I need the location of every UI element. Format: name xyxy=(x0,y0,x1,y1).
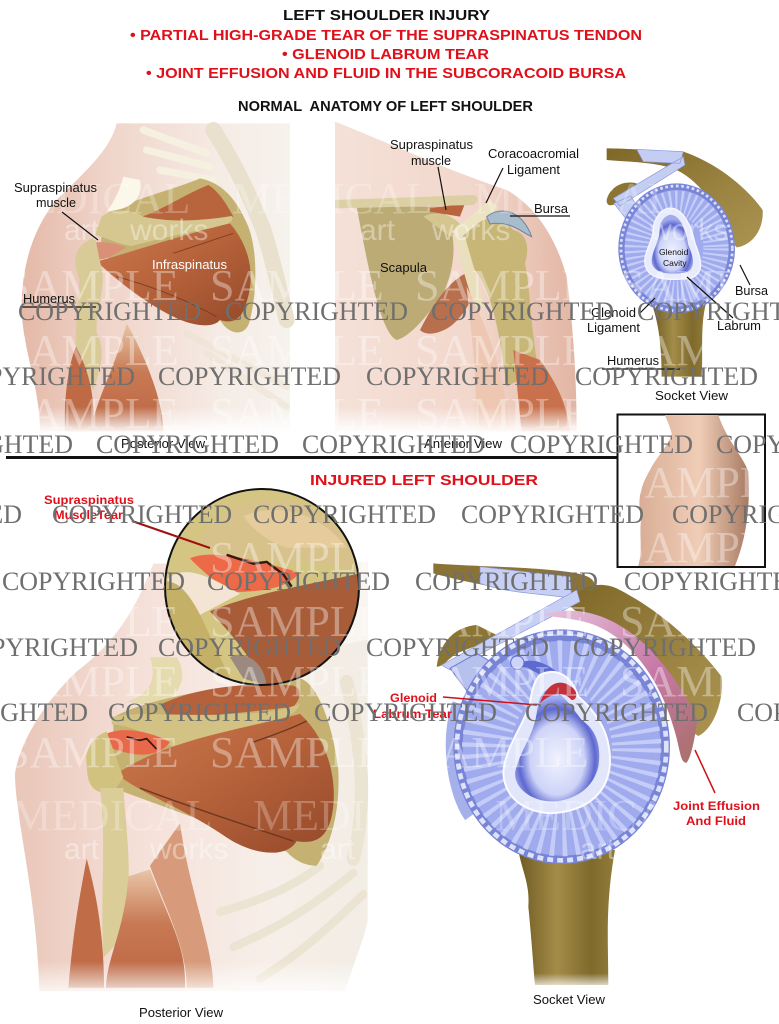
fibres xyxy=(637,203,716,293)
upper bone xyxy=(200,500,363,569)
watermark: art works: works xyxy=(149,833,228,866)
watermark: MEDICAL rows: MEDICAL xyxy=(232,174,432,223)
humerus xyxy=(75,237,103,390)
watermark: SAMPLE rows: SAMPLE xyxy=(5,389,179,438)
capsule stripes xyxy=(621,186,732,311)
watermark: SAMPLE rows: SAMPLE xyxy=(5,261,179,310)
supraspinatus peek xyxy=(430,203,465,217)
callout: supraspinatus muscle tear xyxy=(44,495,210,548)
callout: joint effusion and fluid: Joint Effusion xyxy=(673,801,760,813)
watermark: COPYRIGHTED rows: COPYRIGHTED xyxy=(2,567,185,596)
circle contents xyxy=(163,488,363,689)
normal posterior labels: muscle xyxy=(36,196,76,210)
coracoacromial ligament xyxy=(452,200,498,239)
callout: supraspinatus muscle tear: MuscleTear xyxy=(54,510,124,522)
watermark: COPYRIGHTED rows: COPYRIGHTED xyxy=(302,430,485,459)
labrum xyxy=(503,672,610,813)
arm muscle long head xyxy=(106,869,185,988)
clavicle xyxy=(335,195,478,208)
coracohumeral ligament xyxy=(450,653,493,695)
humeral head xyxy=(86,732,123,793)
watermark: COPYRIGHTED rows: COPYRIGHTED xyxy=(158,633,341,662)
watermark: COPYRIGHTED rows: COPYRIGHTED xyxy=(415,567,598,596)
watermark: SAMPLE rows: SAMPLE xyxy=(415,597,589,646)
watermark: art works: art xyxy=(580,833,616,866)
normal socket labels: Cavity xyxy=(663,258,687,268)
watermark: SAMPLE rows: SAMPLE xyxy=(210,326,384,375)
normal socket labels: Ligament xyxy=(587,321,641,335)
coracoacromial ligament xyxy=(442,590,580,670)
skin silhouette xyxy=(15,562,368,991)
humerus xyxy=(462,219,538,387)
normal posterior labels xyxy=(14,181,227,451)
watermark: COPYRIGHTED rows: COPYRIGHTED xyxy=(461,500,644,529)
supraspinatus xyxy=(137,185,233,240)
watermark: COPYRIGHTED rows: COPYRIGHTED xyxy=(431,297,614,326)
glenoid cavity xyxy=(515,690,599,802)
callout: joint effusion and fluid: And Fluid xyxy=(686,816,746,828)
watermark: MEDICAL rows: MEDICAL xyxy=(253,791,453,840)
callout: joint effusion and fluid xyxy=(673,750,760,828)
capsule xyxy=(618,183,735,313)
clavicle xyxy=(433,563,595,598)
arm muscles xyxy=(65,347,94,432)
lower bone xyxy=(163,582,230,679)
watermark: COPYRIGHTED rows: COPYRIGHTED xyxy=(573,633,756,662)
watermark: art works: works xyxy=(649,214,728,247)
watermark: art works xyxy=(64,214,728,866)
normal socket labels: Humerus xyxy=(607,354,659,368)
bursa xyxy=(487,211,532,237)
tear crack xyxy=(227,555,292,587)
supraspinatus insertion xyxy=(80,242,126,260)
normal anterior labels: Supraspinatus xyxy=(390,138,473,152)
watermark: SAMPLE rows: SAMPLE xyxy=(5,728,179,777)
bottom fade xyxy=(13,961,370,1000)
panel: normal posterior view xyxy=(20,123,292,433)
watermark: SAMPLE rows: SAMPLE xyxy=(5,597,179,646)
spine of scapula xyxy=(95,211,232,246)
glenoid cavity xyxy=(652,215,693,274)
watermark: COPYRIGHTED rows: COPYRIGHTED xyxy=(314,698,497,727)
neck highlight xyxy=(107,177,141,212)
radial fibres xyxy=(487,665,637,832)
watermark: COPYRIGHTED rows: COPYRIGHTED xyxy=(52,500,232,529)
normal anterior labels: Scapula xyxy=(380,261,427,275)
watermark: COPYRIGHTED rows: COPYRIGHTED xyxy=(575,362,758,391)
inset: body location xyxy=(618,414,765,567)
injured view captions xyxy=(139,993,606,1020)
joint lining xyxy=(463,641,661,856)
capsule left band xyxy=(452,703,470,817)
tear cracks xyxy=(127,737,157,749)
clavicle ligament xyxy=(480,567,572,598)
normal anterior labels: Coracoacromial xyxy=(488,147,579,161)
normal socket labels xyxy=(587,247,768,403)
watermark: art works: works xyxy=(431,214,510,247)
watermark: COPYRIGHTED rows: COPYRIGHTED xyxy=(96,430,279,459)
torn supraspinatus xyxy=(95,730,170,755)
tendon cross-section xyxy=(511,656,524,669)
infraspinatus muscle xyxy=(117,714,334,853)
scapula xyxy=(357,207,454,340)
watermark: SAMPLE rows: SAMPLE xyxy=(5,657,179,706)
watermark: COPYRIGHTED rows: COPYRIGHTED xyxy=(366,362,549,391)
callout: glenoid labrum tear: Labrum Tear xyxy=(373,709,453,721)
torso xyxy=(638,415,749,566)
watermark: SAMPLE rows: SAMPLE xyxy=(210,533,384,582)
inset frame xyxy=(618,414,765,567)
callout: glenoid labrum tear xyxy=(373,693,537,721)
circle base xyxy=(163,488,363,689)
bottom fade xyxy=(20,407,292,433)
skin silhouette xyxy=(22,123,290,432)
muscle xyxy=(210,572,363,689)
ligaments xyxy=(613,149,685,221)
watermark: SAMPLE rows: SAMPLE xyxy=(210,389,384,438)
normal socket labels: Bursa xyxy=(735,284,768,298)
watermark: SAMPLE rows: SAMPLE xyxy=(210,261,384,310)
watermark: COPYRIGHTED rows: COPYRIGHTED xyxy=(253,500,436,529)
circle outline xyxy=(165,489,359,685)
normal anterior labels: Bursa xyxy=(534,202,568,216)
lower arm soft tissue xyxy=(467,287,510,432)
watermark: SAMPLE rows: SAMPLE xyxy=(415,389,589,438)
scapula xyxy=(100,178,255,332)
normal posterior labels: Supraspinatus xyxy=(14,181,97,195)
normal anterior labels: Ligament xyxy=(507,163,561,177)
muscle fibres xyxy=(117,233,233,317)
injured view captions: Socket View xyxy=(533,993,606,1007)
panel: normal socket view xyxy=(607,148,763,377)
normal posterior labels: Posterior View xyxy=(121,437,206,451)
capsule pattern xyxy=(457,633,666,860)
watermark: SAMPLE rows: SAMPLE xyxy=(415,728,589,777)
callout: glenoid labrum tear: Glenoid xyxy=(390,693,437,705)
watermark: art works: works xyxy=(129,214,208,247)
arm tendon medial xyxy=(150,823,213,988)
torso white upper area xyxy=(200,562,368,653)
watermark: art works: art xyxy=(320,833,356,866)
labrum tear xyxy=(540,683,576,703)
arm muscle lateral xyxy=(68,859,104,988)
watermark: COPYRIGHTED rows: COPYRIGHTED xyxy=(18,297,201,326)
watermark: SAMPLE rows: SAMPLE xyxy=(210,597,384,646)
muscle division lines xyxy=(140,721,307,841)
watermark: SAMPLE rows: SAMPLE xyxy=(210,728,384,777)
watermark: MEDICAL rows: MEDICAL xyxy=(12,791,212,840)
watermark: art works: art xyxy=(360,214,396,247)
acromion neck xyxy=(126,657,182,707)
watermark: art works: art xyxy=(64,214,100,247)
title: LEFT SHOULDER INJURY xyxy=(283,7,490,24)
watermark: COPYRIGHTED rows: COPYRIGHTED xyxy=(108,698,291,727)
supraspinatus xyxy=(163,684,300,717)
section divider xyxy=(6,456,617,459)
watermark: COPYRIGHTED rows: COPYRIGHTED xyxy=(225,297,408,326)
deltoid muscle xyxy=(513,350,570,432)
scapula xyxy=(113,679,339,866)
rotator interval xyxy=(625,190,729,307)
panel: injured socket view xyxy=(433,563,722,990)
distended bursa xyxy=(540,611,697,763)
coracoid xyxy=(607,182,637,205)
pale tissue xyxy=(167,572,240,615)
panel: injured posterior view xyxy=(13,562,370,1000)
normal socket labels: Labrum xyxy=(717,319,761,333)
gray tissue xyxy=(230,655,267,686)
acromion xyxy=(570,585,722,736)
watermark: SAMPLE rows: SAMPLE xyxy=(415,326,589,375)
bottom fade xyxy=(333,407,580,433)
watermark: SAMPLE rows: SAMPLE xyxy=(5,326,179,375)
upper bone highlight xyxy=(243,510,347,548)
normal posterior labels: Infraspinatus xyxy=(152,258,227,272)
normal socket labels: Socket View xyxy=(655,389,729,403)
labrum xyxy=(645,208,701,279)
injured view captions: Posterior View xyxy=(139,1006,224,1020)
heading: injured left shoulder: INJURED LEFT SHOULDER xyxy=(310,472,538,489)
normal anterior labels: muscle xyxy=(411,154,451,168)
watermark: COPYRIGHTED rows xyxy=(0,297,779,727)
coracoid xyxy=(437,625,500,667)
watermark: COPYRIGHTED rows: COPYRIGHTED xyxy=(366,633,549,662)
finding: joint effusion: • JOINT EFFUSION AND FLUID IN THE SUBCORACOID BURSA xyxy=(146,65,626,82)
watermark: COPYRIGHTED rows: COPYRIGHTED xyxy=(525,698,708,727)
watermark: COPYRIGHTED rows: COPYRIGHTED xyxy=(207,567,390,596)
humerus shaft xyxy=(518,850,615,985)
watermark: MEDICAL rows: MEDICAL xyxy=(495,791,695,840)
skin silhouette xyxy=(335,122,577,432)
normal socket labels: Glenoid xyxy=(591,306,636,320)
spine of scapula xyxy=(112,703,300,749)
capsule xyxy=(453,629,670,864)
heading: normal anatomy: NORMAL ANATOMY OF LEFT SHOULDER xyxy=(238,98,533,115)
biceps tendon xyxy=(453,237,485,310)
callout: supraspinatus muscle tear: Supraspinatus xyxy=(44,495,134,507)
watermark: MEDICAL rows: MEDICAL xyxy=(474,174,674,223)
coracoid xyxy=(423,213,463,237)
zoomed detail: supraspinatus tear xyxy=(163,488,363,689)
watermark: SAMPLE rows: SAMPLE xyxy=(415,261,589,310)
torn tendon xyxy=(190,555,300,592)
triceps xyxy=(91,323,163,432)
watermark: MEDICAL rows xyxy=(0,174,695,840)
biceps tendon xyxy=(522,661,557,680)
normal posterior labels: Humerus xyxy=(23,292,75,306)
humerus shaft xyxy=(652,303,706,377)
watermark: SAMPLE rows xyxy=(5,261,779,777)
finding: supraspinatus tear: • PARTIAL HIGH-GRADE TEAR OF THE SUPRASPINATUS TENDON xyxy=(130,27,642,44)
normal anterior labels xyxy=(380,138,579,451)
title block xyxy=(130,7,642,115)
watermark: SAMPLE rows: SAMPLE xyxy=(415,657,589,706)
infraspinatus muscle xyxy=(97,223,251,325)
watermark: COPYRIGHTED rows: COPYRIGHTED xyxy=(510,430,693,459)
acromion xyxy=(607,148,763,247)
finding: glenoid labrum tear: • GLENOID LABRUM TEAR xyxy=(282,46,489,63)
humerus shaft xyxy=(100,788,129,958)
ribs xyxy=(220,682,363,979)
spine and ribs xyxy=(143,130,287,407)
normal anterior labels: Anterior View xyxy=(424,437,503,451)
normal socket labels: Glenoid xyxy=(659,247,689,257)
watermark: SAMPLE rows: SAMPLE xyxy=(210,657,384,706)
subscapularis muscle xyxy=(420,270,475,334)
bottom fade xyxy=(532,973,612,990)
panel: normal anterior view xyxy=(333,122,580,433)
watermark: art works: art xyxy=(64,833,100,866)
watermark: COPYRIGHTED rows: COPYRIGHTED xyxy=(158,362,341,391)
